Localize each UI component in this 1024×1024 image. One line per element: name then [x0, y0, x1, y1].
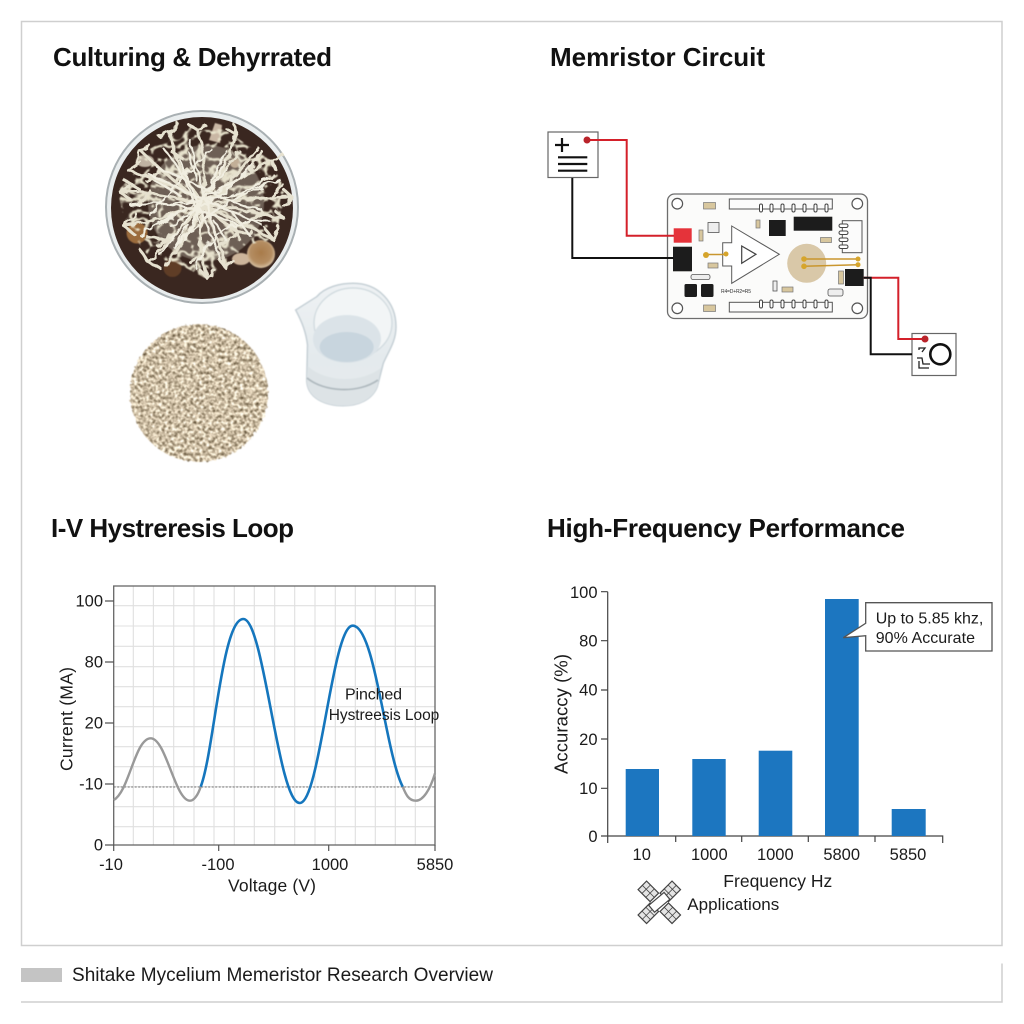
- y axis labels: 20: [579, 731, 598, 749]
- y axis labels: 10: [579, 780, 598, 798]
- panel: culturing and dehydrated: [53, 42, 396, 462]
- x axis title: Frequency Hz: [723, 871, 832, 891]
- y axis labels: 40: [579, 682, 598, 700]
- y axis labels: 100: [75, 592, 103, 610]
- heading: I-V hysteresis: I-V Hystreresis Loop: [51, 513, 294, 543]
- annotation: Pinched: [345, 686, 402, 704]
- icon: satellite: [638, 881, 681, 924]
- x axis title: Voltage (V): [228, 876, 316, 896]
- photo: dehydrated mycelium disc: [130, 324, 268, 462]
- panel: memristor circuit: [548, 42, 956, 376]
- circuit board: [668, 194, 868, 318]
- mushrooms: [126, 123, 275, 277]
- x axis labels: -100: [201, 856, 235, 874]
- y axis title: Current (MA): [56, 667, 76, 771]
- line chart: [56, 586, 453, 896]
- x axis labels: 1000: [691, 846, 728, 864]
- heading: culturing: Culturing & Dehyrrated: [53, 42, 332, 72]
- x axis labels: 1000: [312, 856, 348, 874]
- curve: gray tails: [114, 738, 435, 801]
- y axis labels: [570, 584, 598, 846]
- x axis labels: 1000: [757, 846, 794, 864]
- footer swatch: [21, 968, 62, 982]
- circuit board: R4=D+R2=R5: [721, 289, 751, 295]
- annotation: Hystreesis Loop: [329, 707, 439, 724]
- applications label: Applications: [687, 895, 779, 914]
- wires from board to output: [864, 278, 928, 354]
- curve: blue loop: [201, 619, 403, 803]
- panel: high-frequency performance: [547, 513, 992, 924]
- annotation: [329, 686, 439, 724]
- y axis labels: 100: [570, 584, 598, 602]
- y axis labels: 0: [588, 828, 598, 846]
- x axis labels: 5800: [823, 846, 860, 864]
- bar chart: [550, 584, 992, 924]
- y axis labels: 80: [579, 632, 598, 650]
- footer bar: [21, 964, 1002, 1002]
- heading: memristor circuit: Memristor Circuit: [550, 42, 765, 72]
- panel: I-V hysteresis loop: [51, 513, 453, 896]
- x axis labels: 5850: [890, 846, 926, 864]
- photo: petri dish with mycelium: [106, 111, 298, 303]
- y axis labels: 0: [94, 836, 103, 854]
- heading: high-frequency performance: High-Frequency Performance: [547, 513, 905, 543]
- y axis labels: 80: [85, 654, 103, 672]
- x axis labels: 10: [633, 846, 651, 864]
- callout: [843, 603, 992, 651]
- photo: beaker of water: [296, 283, 396, 406]
- x axis labels: -10: [99, 856, 123, 874]
- wires from battery to board: [572, 136, 674, 258]
- mycelium strands: [120, 124, 292, 278]
- x axis labels: [99, 856, 453, 874]
- footer title: Shitake Mycelium Memeristor Research Overview: [72, 964, 494, 986]
- y axis labels: -10: [79, 776, 103, 794]
- battery symbol: [548, 132, 598, 178]
- y axis title: Accuraccy (%): [550, 654, 572, 774]
- bars: [626, 599, 926, 836]
- x axis labels: [633, 846, 926, 864]
- y axis labels: 20: [85, 714, 103, 732]
- x axis labels: 5850: [417, 856, 453, 874]
- output module: [912, 334, 956, 376]
- callout: Up to 5.85 khz,: [876, 610, 983, 628]
- callout: 90% Accurate: [876, 630, 975, 647]
- mycelium mass: [118, 125, 292, 278]
- y axis labels: [75, 592, 103, 854]
